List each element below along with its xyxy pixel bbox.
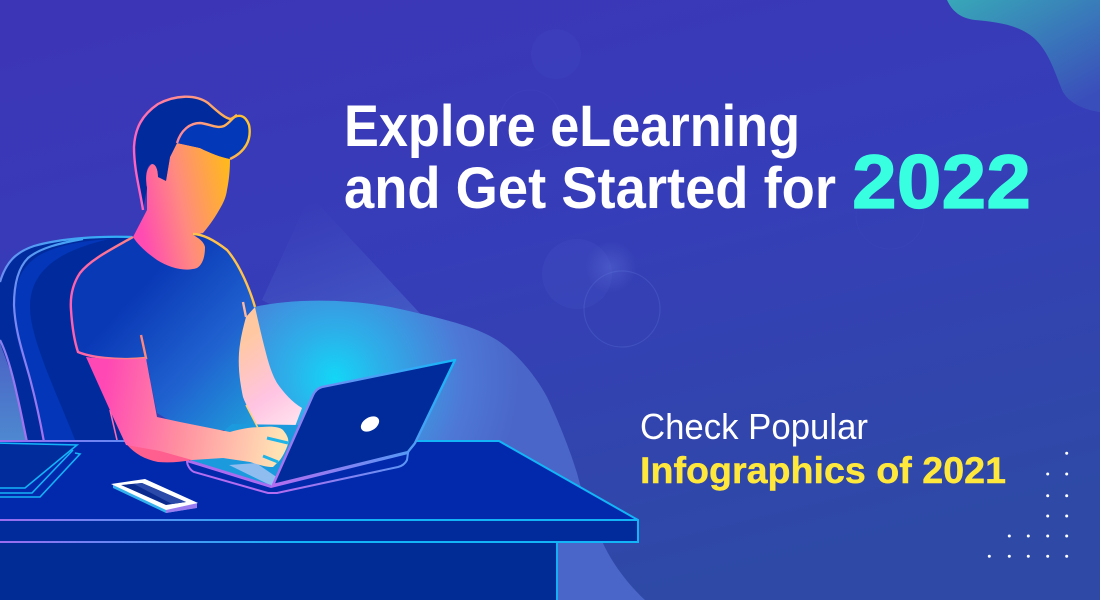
decorative bokeh lights [500,29,924,347]
subheading: Check Popular [640,406,868,447]
heading: and Get Started for [344,156,836,221]
stack of papers [0,443,80,497]
man: head and neck [133,143,230,270]
chair [0,237,150,445]
corner blob top right [947,0,1100,112]
dot grid [988,452,1068,558]
heading: Explore eLearning [344,94,800,159]
man: t-shirt [71,234,262,430]
man: t-shirt outline [71,234,255,440]
heading: 2022 [852,140,1031,225]
glowing blob behind laptop [230,301,645,600]
man: far arm [239,307,302,445]
smartphone [111,479,198,513]
desk [0,441,638,600]
laptop logo [358,413,382,435]
subheading: Infographics of 2021 [640,450,1006,491]
man: hair [134,97,250,210]
subheading [640,406,1006,491]
blob behind chair [0,330,30,445]
man: near arm and hand [86,357,288,467]
laptop base [187,424,408,493]
light beam behind man [262,195,440,335]
laptop lid [273,360,455,485]
heading [344,94,1031,225]
